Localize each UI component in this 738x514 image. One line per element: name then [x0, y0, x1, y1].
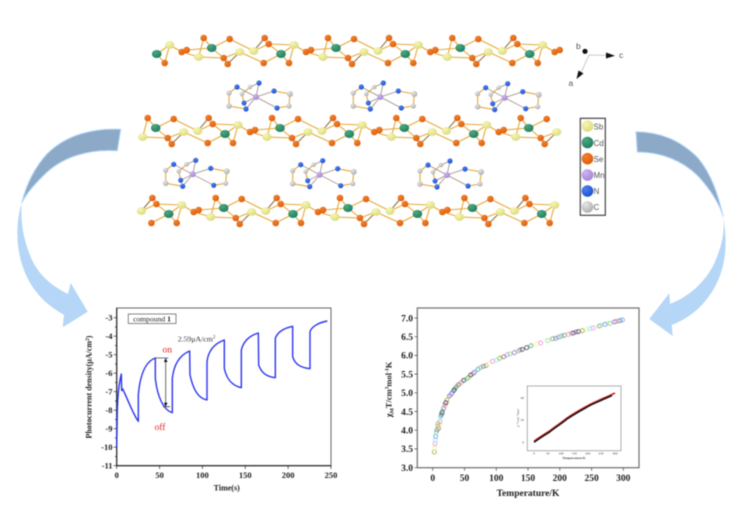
crystallographic axes indicator: c [619, 50, 624, 60]
crystallographic axes indicator [568, 41, 624, 88]
inset: linear fit panel: 0 [533, 452, 535, 456]
inset: linear fit panel: Temperature/K [562, 456, 586, 460]
inset: linear fit panel: 20 [520, 418, 524, 422]
y-axis ticks and labels: 3.0 [401, 464, 413, 474]
inset fit curve [534, 393, 615, 442]
chart: photocurrent density versus time [84, 308, 337, 492]
photocurrent curve [117, 321, 327, 447]
legend: atom types: Mn [594, 171, 605, 180]
y-axis title: M [390, 407, 396, 413]
crystal structure: bottom anionic chain [137, 195, 559, 227]
inset: linear fit panel [516, 386, 621, 460]
off label: off [155, 422, 166, 433]
y-axis title: ) [84, 335, 94, 338]
x-axis ticks and labels: 100 [196, 470, 209, 480]
y-axis title: 2 [85, 338, 91, 341]
photocurrent magnitude label: 2 [213, 336, 216, 340]
arrow: right curved arrow from structure to magnetic chart [636, 132, 726, 336]
legend: atom types: N [594, 187, 600, 196]
x-axis ticks and labels: 50 [155, 470, 164, 480]
y-axis ticks and labels: 4.0 [401, 426, 413, 436]
inset: linear fit panel: χ⁻¹/cm⁻³mol [516, 409, 520, 427]
photocurrent magnitude label: 2.59μA/cm [178, 334, 213, 344]
y-axis ticks and labels: 4.5 [401, 408, 413, 418]
inset: linear fit panel: 0 [522, 440, 524, 444]
inset: linear fit panel: 100 [558, 452, 564, 456]
crystallographic axes indicator: a [568, 78, 574, 88]
y-axis title: mol [384, 372, 394, 387]
legend: atom types: C [594, 203, 600, 212]
x-axis ticks and labels: 0 [430, 474, 435, 484]
crystal structure: upper row of Mn complexes [226, 80, 542, 112]
x-axis ticks and labels: 150 [521, 474, 535, 484]
inset: linear fit panel: 40 [520, 396, 524, 400]
y-axis ticks and labels: -10 [101, 442, 112, 452]
crystal structure: top anionic chain [152, 35, 563, 67]
x-axis ticks and labels: 200 [282, 470, 294, 480]
legend: atom types: Se [594, 155, 604, 164]
x-axis title: Temperature/K [497, 489, 560, 499]
y-axis ticks and labels: -11 [102, 461, 112, 471]
legend: atom types: Sb [594, 122, 604, 132]
legend: atom types: Cd [594, 139, 604, 148]
x-axis ticks and labels: 200 [553, 474, 567, 484]
y-axis ticks and labels: 5.5 [401, 370, 413, 380]
crystal structure: middle anionic chain [138, 115, 561, 147]
y-axis ticks and labels: -4 [105, 331, 113, 341]
y-axis ticks and labels: 7.0 [401, 314, 413, 324]
y-axis title: T/cm [384, 389, 394, 408]
y-axis ticks and labels [401, 314, 417, 474]
y-axis ticks and labels: -9 [105, 424, 112, 434]
inset: linear fit panel: 200 [585, 452, 591, 456]
y-axis ticks and labels: -3 [105, 313, 112, 323]
inset: linear fit panel: 300 [612, 452, 618, 456]
legend: atom types [580, 118, 605, 215]
inset: linear fit panel: 150 [572, 452, 577, 456]
inset: linear fit panel: 250 [598, 452, 604, 456]
y-axis ticks and labels: 5.0 [401, 389, 413, 399]
y-axis title: K [384, 361, 394, 368]
y-axis title: χ [384, 413, 394, 417]
x-axis ticks and labels: 100 [489, 474, 504, 484]
y-axis title: -1 [384, 368, 390, 373]
double-headed measurement arrow [155, 358, 170, 407]
y-axis ticks and labels: -7 [105, 387, 113, 397]
crystal structure: lower row of Mn complexes [163, 158, 484, 190]
scatter series: open circles [432, 318, 624, 454]
chart: magnetic susceptibility product versus temperature [384, 308, 639, 499]
arrow: left curved arrow from structure to photocurrent chart [17, 129, 121, 327]
x-axis ticks and labels [430, 468, 631, 484]
y-axis ticks and labels: -5 [105, 350, 112, 360]
y-axis ticks and labels: 6.0 [401, 352, 413, 362]
crystallographic axes indicator: b [576, 41, 581, 51]
compound label: compound 1 [133, 314, 171, 324]
y-axis ticks and labels [101, 313, 117, 471]
on label: on [163, 346, 172, 356]
y-axis ticks and labels: 6.5 [401, 333, 413, 343]
inset: linear fit panel: 50 [546, 452, 550, 456]
y-axis ticks and labels: 3.5 [401, 445, 413, 455]
y-axis title: Photocurrent density(μA/cm [84, 341, 94, 438]
y-axis ticks and labels: -6 [105, 368, 112, 378]
x-axis ticks and labels: 150 [239, 470, 252, 480]
x-axis ticks and labels: 300 [616, 474, 631, 484]
x-axis ticks and labels: 250 [584, 474, 599, 484]
y-axis ticks and labels: -8 [105, 405, 112, 415]
x-axis ticks and labels [115, 466, 337, 480]
y-axis title: 3 [384, 386, 390, 389]
x-axis title: Time(s) [214, 484, 240, 492]
x-axis ticks and labels: 0 [115, 470, 119, 480]
x-axis ticks and labels: 250 [325, 470, 337, 480]
x-axis ticks and labels: 50 [460, 474, 470, 484]
